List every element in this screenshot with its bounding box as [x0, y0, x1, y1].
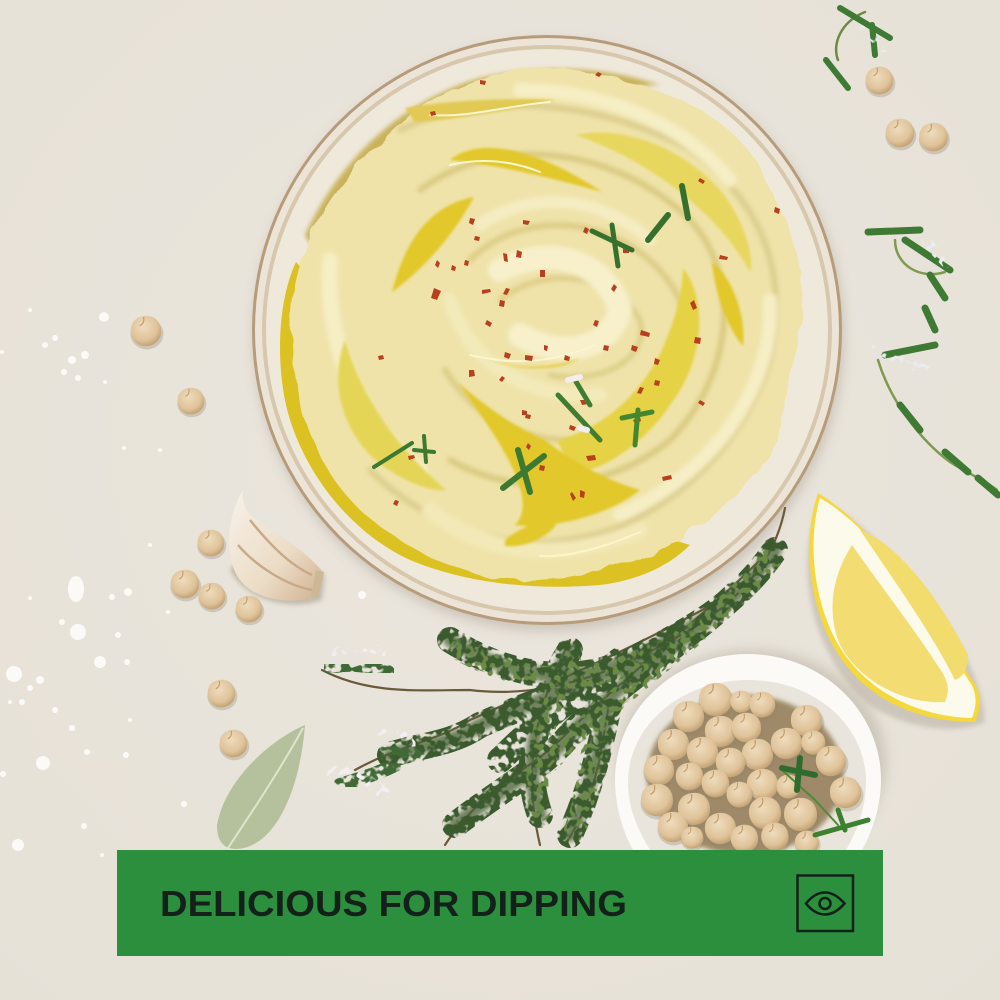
garlic clove	[229, 490, 325, 605]
small bowl interior	[628, 680, 866, 850]
thyme garnish on hummus	[374, 186, 688, 492]
middle sprig	[868, 230, 950, 298]
small bowl body	[615, 654, 881, 850]
lower long sprig	[875, 308, 998, 495]
oil highlights	[430, 102, 640, 556]
thyme foliage: dark layer	[390, 550, 775, 835]
banner background	[117, 850, 883, 956]
small bowl shadow	[618, 650, 886, 874]
thyme bundle	[322, 508, 785, 845]
garlic body	[229, 490, 323, 601]
garlic shadow	[230, 540, 325, 605]
chili flakes	[378, 72, 780, 506]
bowl interior	[266, 49, 828, 611]
hummus swirl shading	[329, 90, 776, 550]
chickpeas in bowl	[641, 683, 864, 857]
bowl shadow	[254, 41, 844, 631]
sea salt scatter	[0, 308, 366, 857]
icon: eye in a square	[798, 876, 853, 931]
thyme flowering tips	[330, 646, 420, 795]
thyme sprigs upper right	[826, 8, 998, 495]
large bowl of hummus	[252, 35, 844, 631]
olive oil pool under hummus	[280, 262, 690, 587]
loose chickpeas	[130, 67, 950, 760]
thyme foliage: soft underlayer	[390, 550, 775, 835]
top sprig	[826, 8, 890, 88]
olive oil pools on top	[338, 99, 751, 546]
lemon shadow	[807, 500, 985, 729]
lemon flesh segments	[833, 545, 948, 702]
banner heading: DELICIOUS FOR DIPPING	[160, 883, 627, 924]
lemon rind and pith	[809, 493, 980, 722]
olive oil: muted rim of oil at top	[305, 69, 660, 260]
small bowl of chickpeas	[615, 650, 886, 874]
thyme stems	[322, 508, 785, 845]
sage leaf	[217, 725, 305, 849]
bowl rim	[252, 35, 842, 625]
thyme sprig in bowl	[782, 758, 868, 835]
thyme foliage: light layer	[460, 560, 770, 830]
lemon wedge	[807, 493, 985, 729]
hummus body	[291, 68, 803, 580]
banner	[117, 850, 883, 956]
